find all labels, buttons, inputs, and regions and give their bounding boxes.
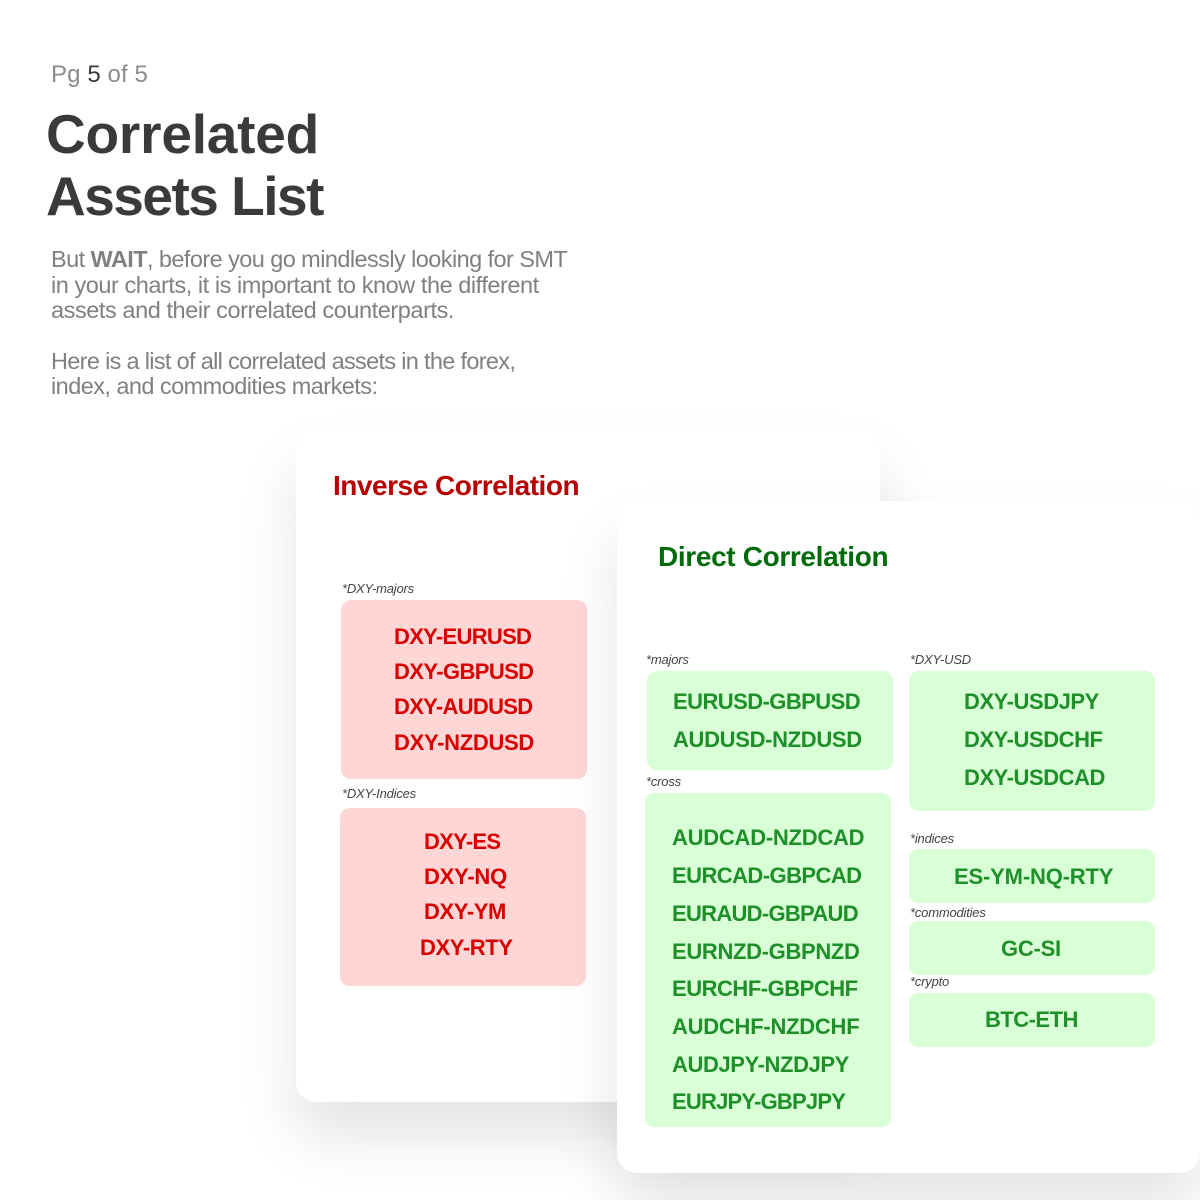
box: crypto pairs: [909, 993, 1155, 1047]
label: cross: *cross: [646, 774, 681, 789]
label: majors: *majors: [646, 652, 689, 667]
intro text: [51, 246, 568, 399]
panel: inverse correlation: [296, 430, 880, 1102]
heading: direct correlation: Direct Correlation: [658, 541, 888, 572]
label: indices: *indices: [910, 831, 954, 846]
box: DXY-USD pairs: DXY-USDCAD: [964, 765, 1105, 790]
title: [46, 103, 324, 227]
title: Assets List: [46, 165, 323, 227]
box: commodities pairs: GC-SI: [1001, 936, 1061, 961]
label: commodities: *commodities: [910, 905, 986, 920]
box: majors pairs: [647, 671, 893, 770]
box: majors pairs: AUDUSD-NZDUSD: [673, 727, 862, 752]
box: DXY-USD pairs: DXY-USDCHF: [964, 727, 1103, 752]
intro text: But WAIT, before you go mindlessly looking for SMT: [51, 246, 567, 272]
box: DXY-majors pairs: DXY-NZDUSD: [394, 730, 534, 755]
intro text: in your charts, it is important to know the different: [51, 272, 539, 298]
intro text: assets and their correlated counterparts.: [51, 297, 454, 323]
box: DXY-majors pairs: [341, 600, 587, 779]
box: DXY-majors pairs: DXY-AUDUSD: [394, 694, 532, 719]
box: cross pairs: EURCHF-GBPCHF: [672, 976, 858, 1001]
box: DXY-Indices pairs: DXY-NQ: [424, 864, 507, 889]
box: DXY-Indices pairs: DXY-ES: [424, 829, 500, 854]
box: cross pairs: EURNZD-GBPNZD: [672, 939, 860, 964]
box: majors pairs: EURUSD-GBPUSD: [673, 689, 860, 714]
box: commodities pairs: [909, 921, 1155, 975]
box: DXY-USD pairs: [909, 671, 1155, 811]
label: DXY-USD: *DXY-USD: [910, 652, 971, 667]
box: cross pairs: EURAUD-GBPAUD: [672, 901, 858, 926]
box: DXY-Indices pairs: [340, 808, 586, 986]
label: crypto: *crypto: [910, 974, 949, 989]
box: cross pairs: AUDCHF-NZDCHF: [672, 1014, 859, 1039]
intro text: Here is a list of all correlated assets in the forex,: [51, 348, 515, 374]
label: DXY-majors: *DXY-majors: [342, 581, 414, 596]
box: DXY-majors pairs: DXY-EURUSD: [394, 624, 531, 649]
box: cross pairs: EURCAD-GBPCAD: [672, 863, 862, 888]
box: crypto pairs: BTC-ETH: [985, 1007, 1078, 1032]
box: cross pairs: AUDCAD-NZDCAD: [672, 825, 864, 850]
box: DXY-Indices pairs: DXY-YM: [424, 899, 506, 924]
label: DXY-Indices: *DXY-Indices: [342, 786, 416, 801]
heading: inverse correlation: Inverse Correlation: [333, 470, 579, 501]
box: indices pairs: ES-YM-NQ-RTY: [954, 864, 1113, 889]
page indicator: Pg 5 of 5: [51, 61, 148, 88]
title: Correlated: [46, 103, 319, 165]
box: cross pairs: [645, 793, 891, 1127]
box: cross pairs: EURJPY-GBPJPY: [672, 1089, 845, 1114]
box: DXY-majors pairs: DXY-GBPUSD: [394, 659, 533, 684]
box: DXY-USD pairs: DXY-USDJPY: [964, 689, 1099, 714]
box: indices pairs: [909, 849, 1155, 903]
box: DXY-Indices pairs: DXY-RTY: [420, 935, 513, 960]
intro text: index, and commodities markets:: [51, 373, 377, 399]
panel: direct correlation: [617, 501, 1200, 1173]
box: cross pairs: AUDJPY-NZDJPY: [672, 1052, 849, 1077]
